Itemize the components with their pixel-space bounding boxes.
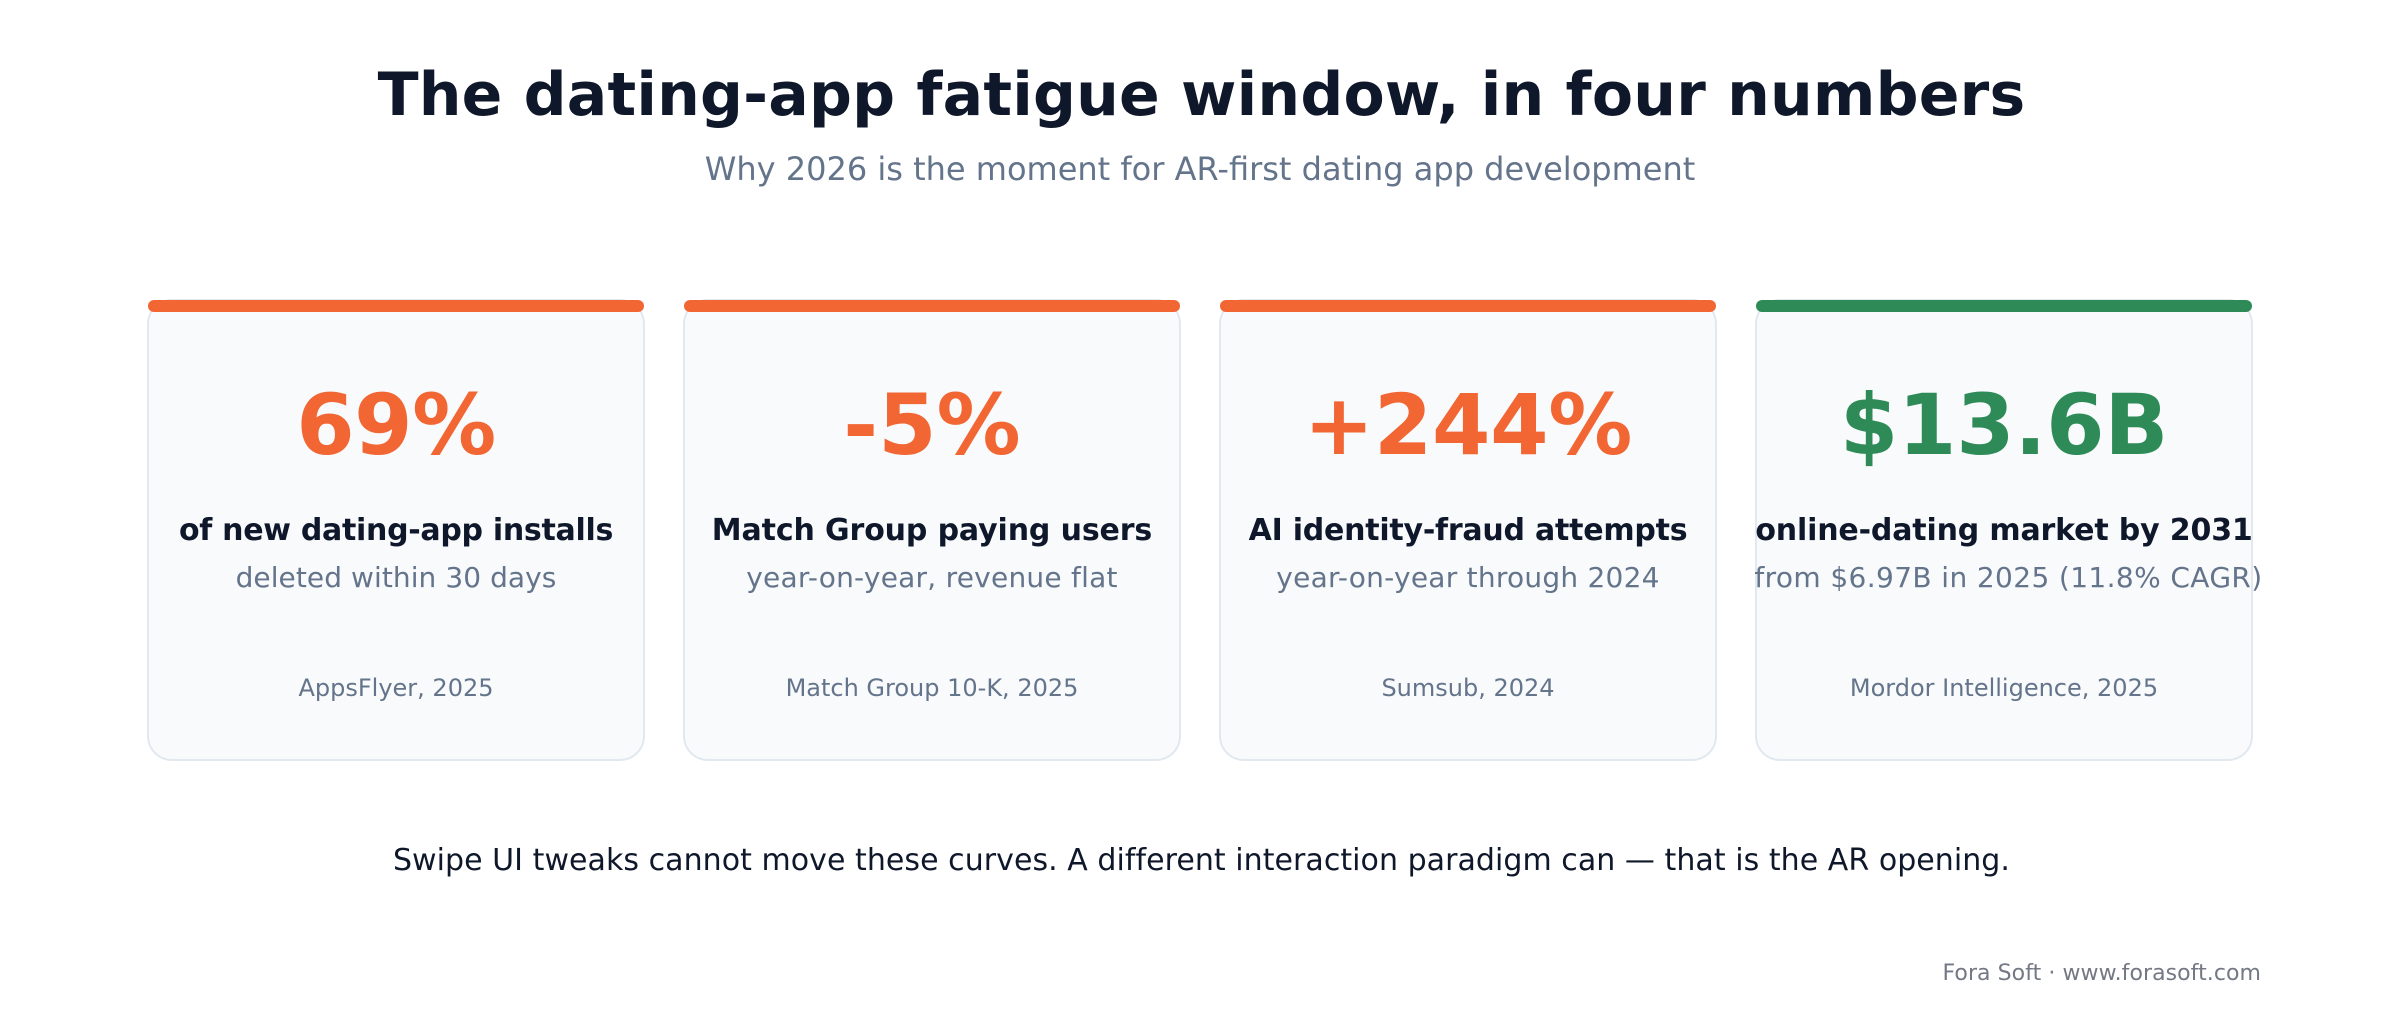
accent bar	[684, 300, 1180, 312]
footer credit: Fora Soft · www.forasoft.com	[1942, 960, 2261, 986]
panel: $13.6B stat card	[1754, 299, 2263, 761]
stat label: Match Group paying users	[712, 512, 1152, 548]
source: Mordor Intelligence, 2025	[1850, 674, 2158, 702]
stat detail: deleted within 30 days	[236, 563, 556, 595]
big number: 69%	[296, 376, 496, 474]
stat label: AI identity-fraud attempts	[1249, 512, 1687, 548]
stat label: online-dating market by 2031	[1755, 512, 2253, 548]
big number: +244%	[1304, 376, 1632, 474]
takeaway: Swipe UI tweaks cannot move these curves. A different interaction paradigm can — that is the AR opening.	[393, 842, 2010, 878]
big number: -5%	[843, 376, 1021, 474]
stat label: of new dating-app installs	[179, 512, 613, 548]
source: Match Group 10-K, 2025	[786, 674, 1078, 702]
title: The dating-app fatigue window, in four numbers	[378, 61, 2025, 131]
panel: -5% stat card	[683, 299, 1181, 761]
card background	[1219, 299, 1717, 761]
panel: +244% stat card	[1219, 299, 1717, 761]
stat detail: from $6.97B in 2025 (11.8% CAGR)	[1754, 563, 2263, 595]
card background	[147, 299, 645, 761]
accent bar	[1220, 300, 1716, 312]
stat detail: year-on-year through 2024	[1276, 563, 1660, 595]
big number: $13.6B	[1840, 376, 2168, 474]
stat detail: year-on-year, revenue flat	[746, 563, 1118, 595]
card background	[1755, 299, 2253, 761]
accent bar	[1756, 300, 2252, 312]
panel: 69% stat card	[147, 299, 645, 761]
subtitle: Why 2026 is the moment for AR-first dating app development	[705, 150, 1695, 188]
source: AppsFlyer, 2025	[298, 674, 494, 702]
accent bar	[148, 300, 644, 312]
source: Sumsub, 2024	[1381, 674, 1555, 702]
card background	[683, 299, 1181, 761]
